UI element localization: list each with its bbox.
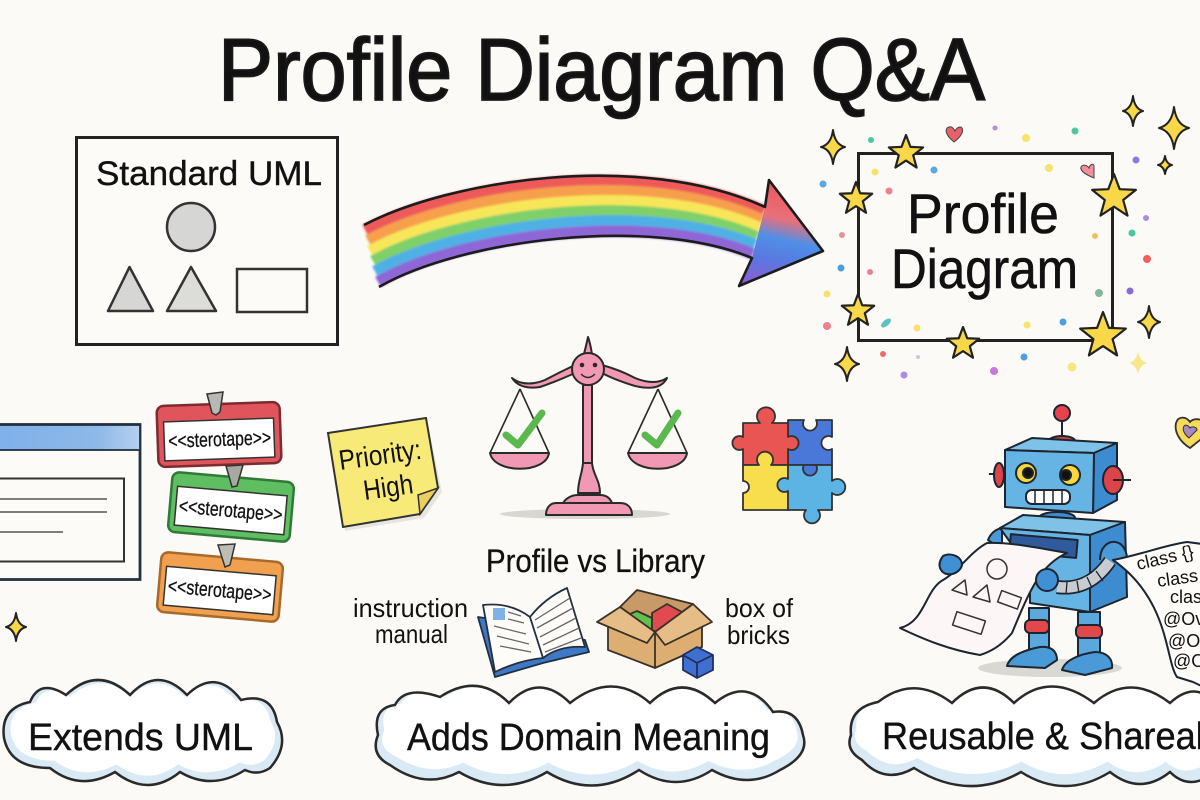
label: instruction manual: manual bbox=[375, 619, 448, 649]
title: Profile Diagram Q&A bbox=[218, 20, 985, 119]
cloud: adds domain meaning bbox=[376, 686, 804, 786]
sticky note text: Priority: bbox=[337, 434, 423, 476]
label: instruction manual: instruction bbox=[353, 593, 468, 623]
panel: standard UML bbox=[76, 138, 338, 344]
icon: blue brick bbox=[683, 647, 713, 678]
icon: box of bricks bbox=[597, 590, 712, 668]
icon: triangle one bbox=[108, 267, 153, 311]
tag: red stereotype: <<sterotape>> bbox=[168, 427, 272, 453]
icon: balance scale bbox=[490, 337, 687, 519]
window inner box bbox=[0, 478, 124, 562]
cloud: adds domain meaning: Adds Domain Meaning bbox=[407, 717, 770, 759]
panel: profile diagram bbox=[820, 96, 1189, 381]
icon: triangle two bbox=[167, 267, 216, 311]
right paper: code bbox=[1113, 541, 1200, 690]
tag: orange stereotype: <<sterotape>> bbox=[167, 575, 272, 606]
heading: standard UML: Standard UML bbox=[96, 155, 322, 193]
right hand bbox=[1036, 569, 1058, 591]
icon: circle bbox=[167, 203, 215, 251]
cloud: extends UML: Extends UML bbox=[28, 717, 253, 759]
right pan bbox=[628, 453, 687, 469]
icon: red tag clip bbox=[207, 392, 223, 415]
antenna bbox=[1049, 405, 1075, 446]
right ear bbox=[1103, 466, 1131, 494]
left check mark bbox=[506, 413, 542, 445]
icon: rectangle bbox=[237, 269, 307, 312]
body bbox=[988, 515, 1127, 612]
label: instruction manual bbox=[353, 593, 468, 649]
blue piece bbox=[788, 420, 832, 465]
icon: open book bbox=[478, 588, 589, 677]
left ear bbox=[989, 463, 1004, 487]
tag: red stereotype bbox=[156, 402, 282, 467]
icon: puzzle bbox=[732, 407, 845, 523]
heading: profile diagram bbox=[891, 182, 1078, 300]
icon: robot bbox=[900, 405, 1200, 690]
sticky note text: High bbox=[361, 468, 415, 506]
right arm bbox=[1057, 561, 1110, 594]
sticky note bbox=[328, 418, 442, 531]
red piece bbox=[732, 407, 799, 465]
smiling face bbox=[572, 353, 604, 385]
heading: profile vs library: Profile vs Library bbox=[486, 543, 705, 579]
heading: profile diagram: Profile bbox=[907, 182, 1059, 245]
scale pillar bbox=[546, 385, 632, 515]
neck bbox=[1039, 512, 1075, 524]
window title bar bbox=[0, 425, 140, 450]
yellow piece bbox=[743, 452, 788, 510]
tag: green stereotype bbox=[168, 472, 294, 542]
icon: pink heart bbox=[1081, 164, 1094, 178]
left pan bbox=[490, 453, 549, 469]
right check mark bbox=[645, 413, 678, 445]
scale beam bbox=[512, 365, 667, 388]
icon: left sparkle bbox=[6, 613, 26, 641]
tag: green stereotype: <<sterotape>> bbox=[178, 495, 283, 526]
heading: profile diagram: Diagram bbox=[891, 237, 1078, 300]
icon: orange tag clip bbox=[218, 544, 235, 567]
sticky note text bbox=[337, 434, 428, 509]
icons: stars bbox=[840, 135, 1136, 358]
green brick bbox=[623, 611, 652, 632]
red brick bbox=[652, 604, 682, 636]
cloud: reusable and shareable bbox=[849, 686, 1200, 786]
icons: sparkles bbox=[821, 96, 1189, 381]
cyan piece bbox=[777, 465, 845, 523]
label: box of bricks bbox=[725, 593, 794, 650]
right paper: code: class {} bbox=[1134, 541, 1195, 574]
left hand bbox=[940, 554, 962, 574]
cloud: extends UML bbox=[4, 680, 282, 785]
arrow: rainbow bbox=[364, 176, 823, 287]
label: box of bricks: box of bbox=[725, 593, 794, 623]
tag: orange stereotype bbox=[157, 552, 283, 622]
icon: green tag clip bbox=[226, 465, 243, 487]
panel: class window bbox=[0, 424, 140, 580]
icon: red heart bbox=[946, 127, 963, 142]
icon: yellow heart bbox=[1176, 418, 1200, 448]
confetti dots bbox=[820, 126, 1151, 378]
legs bbox=[1007, 608, 1112, 675]
head bbox=[1005, 438, 1117, 513]
blue piece tab bbox=[803, 465, 817, 476]
label: box of bricks: bricks bbox=[727, 620, 790, 650]
left paper: UML shapes bbox=[900, 543, 1067, 655]
